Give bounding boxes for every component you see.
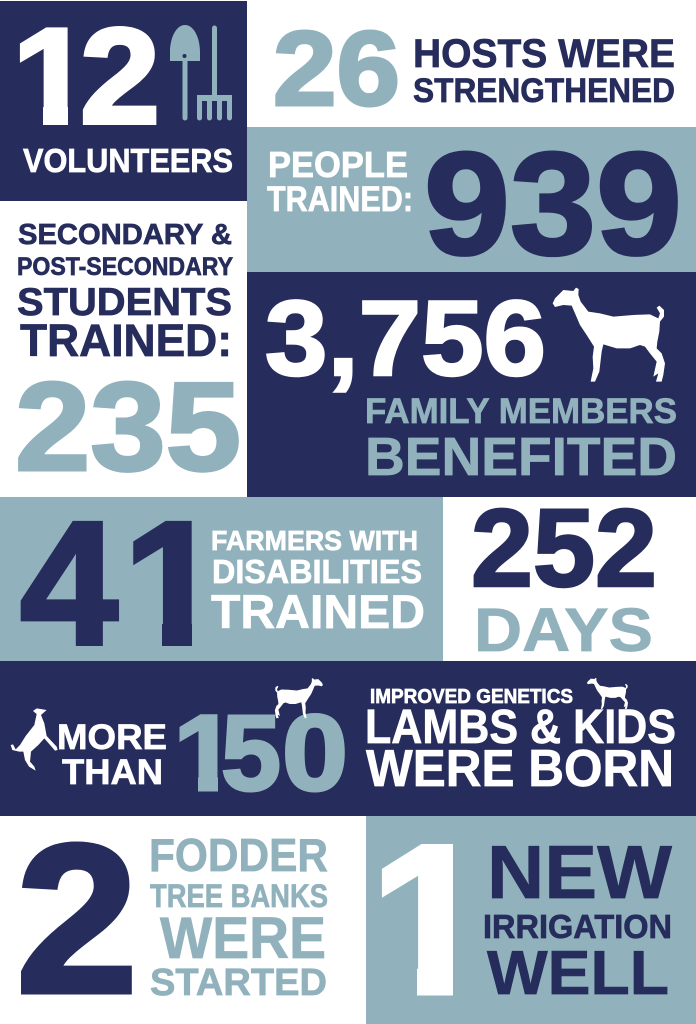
icon: goat on number [275,678,323,718]
panel: family members [247,272,696,497]
label: more: MORE [57,718,167,757]
label: volunteers: VOLUNTEERS [23,142,233,179]
number: 150: 0 [282,692,348,813]
number: 12 [20,26,156,125]
label: well: WELL [487,939,669,1008]
number: 252: 252 [471,487,657,610]
label: trained: TRAINED: [267,180,413,219]
label: benefited: BENEFITED [365,427,677,487]
number: 235: 235 [15,356,241,497]
label: fodder: FODDER [149,829,328,881]
label: strengthened: STRENGTHENED [413,72,675,110]
panel: volunteers [0,0,247,201]
number: 150: 1 [173,692,237,813]
label: new: NEW [487,830,672,914]
number: 12: 2 [80,0,160,152]
label: family members: FAMILY MEMBERS [365,392,677,431]
panel: students trained [0,201,247,497]
label: post-secondary: POST-SECONDARY [17,253,233,281]
panel: farmers with disabilities [0,497,443,661]
label: days: DAYS [474,596,653,664]
icon: rearing goat [11,708,58,771]
number: 12: 1 [12,0,92,152]
icon: goat [553,288,665,382]
icon: shovel and fork [170,25,232,120]
label: students: STUDENTS [17,281,232,324]
icon: small goat [587,678,628,709]
label: irrigation: IRRIGATION [483,908,672,945]
label: were: WERE [160,906,326,971]
number: 939: 939 [424,122,682,285]
panel: fodder tree banks [0,800,366,1024]
label: trained: TRAINED [211,585,425,638]
label: tree banks: TREE BANKS [150,878,328,914]
number: 3,756: 3,756 [265,278,546,398]
number: 150 [180,713,345,792]
panel: days [443,487,696,664]
label: trained: TRAINED: [20,315,232,366]
number: 150: 5 [221,692,281,813]
number: 41: 1 [123,486,223,682]
panel: hosts strengthened [247,0,696,128]
label: started: STARTED [150,962,327,1004]
panel: lambs and kids [0,661,696,816]
number: 41: 4 [20,486,118,682]
label: than: THAN [62,753,163,792]
panel: people trained [247,122,696,285]
label: disabilities: DISABILITIES [212,553,422,590]
label: people: PEOPLE [268,144,408,185]
label: farmers with: FARMERS WITH [211,525,418,556]
label: were born: WERE BORN [366,740,674,798]
label: secondary and: SECONDARY & [18,219,232,251]
panel: irrigation well [366,801,696,1024]
number: 26: 26 [273,10,400,128]
label: improved genetics: IMPROVED GENETICS [370,686,573,708]
label: hosts were: HOSTS WERE [413,32,675,76]
